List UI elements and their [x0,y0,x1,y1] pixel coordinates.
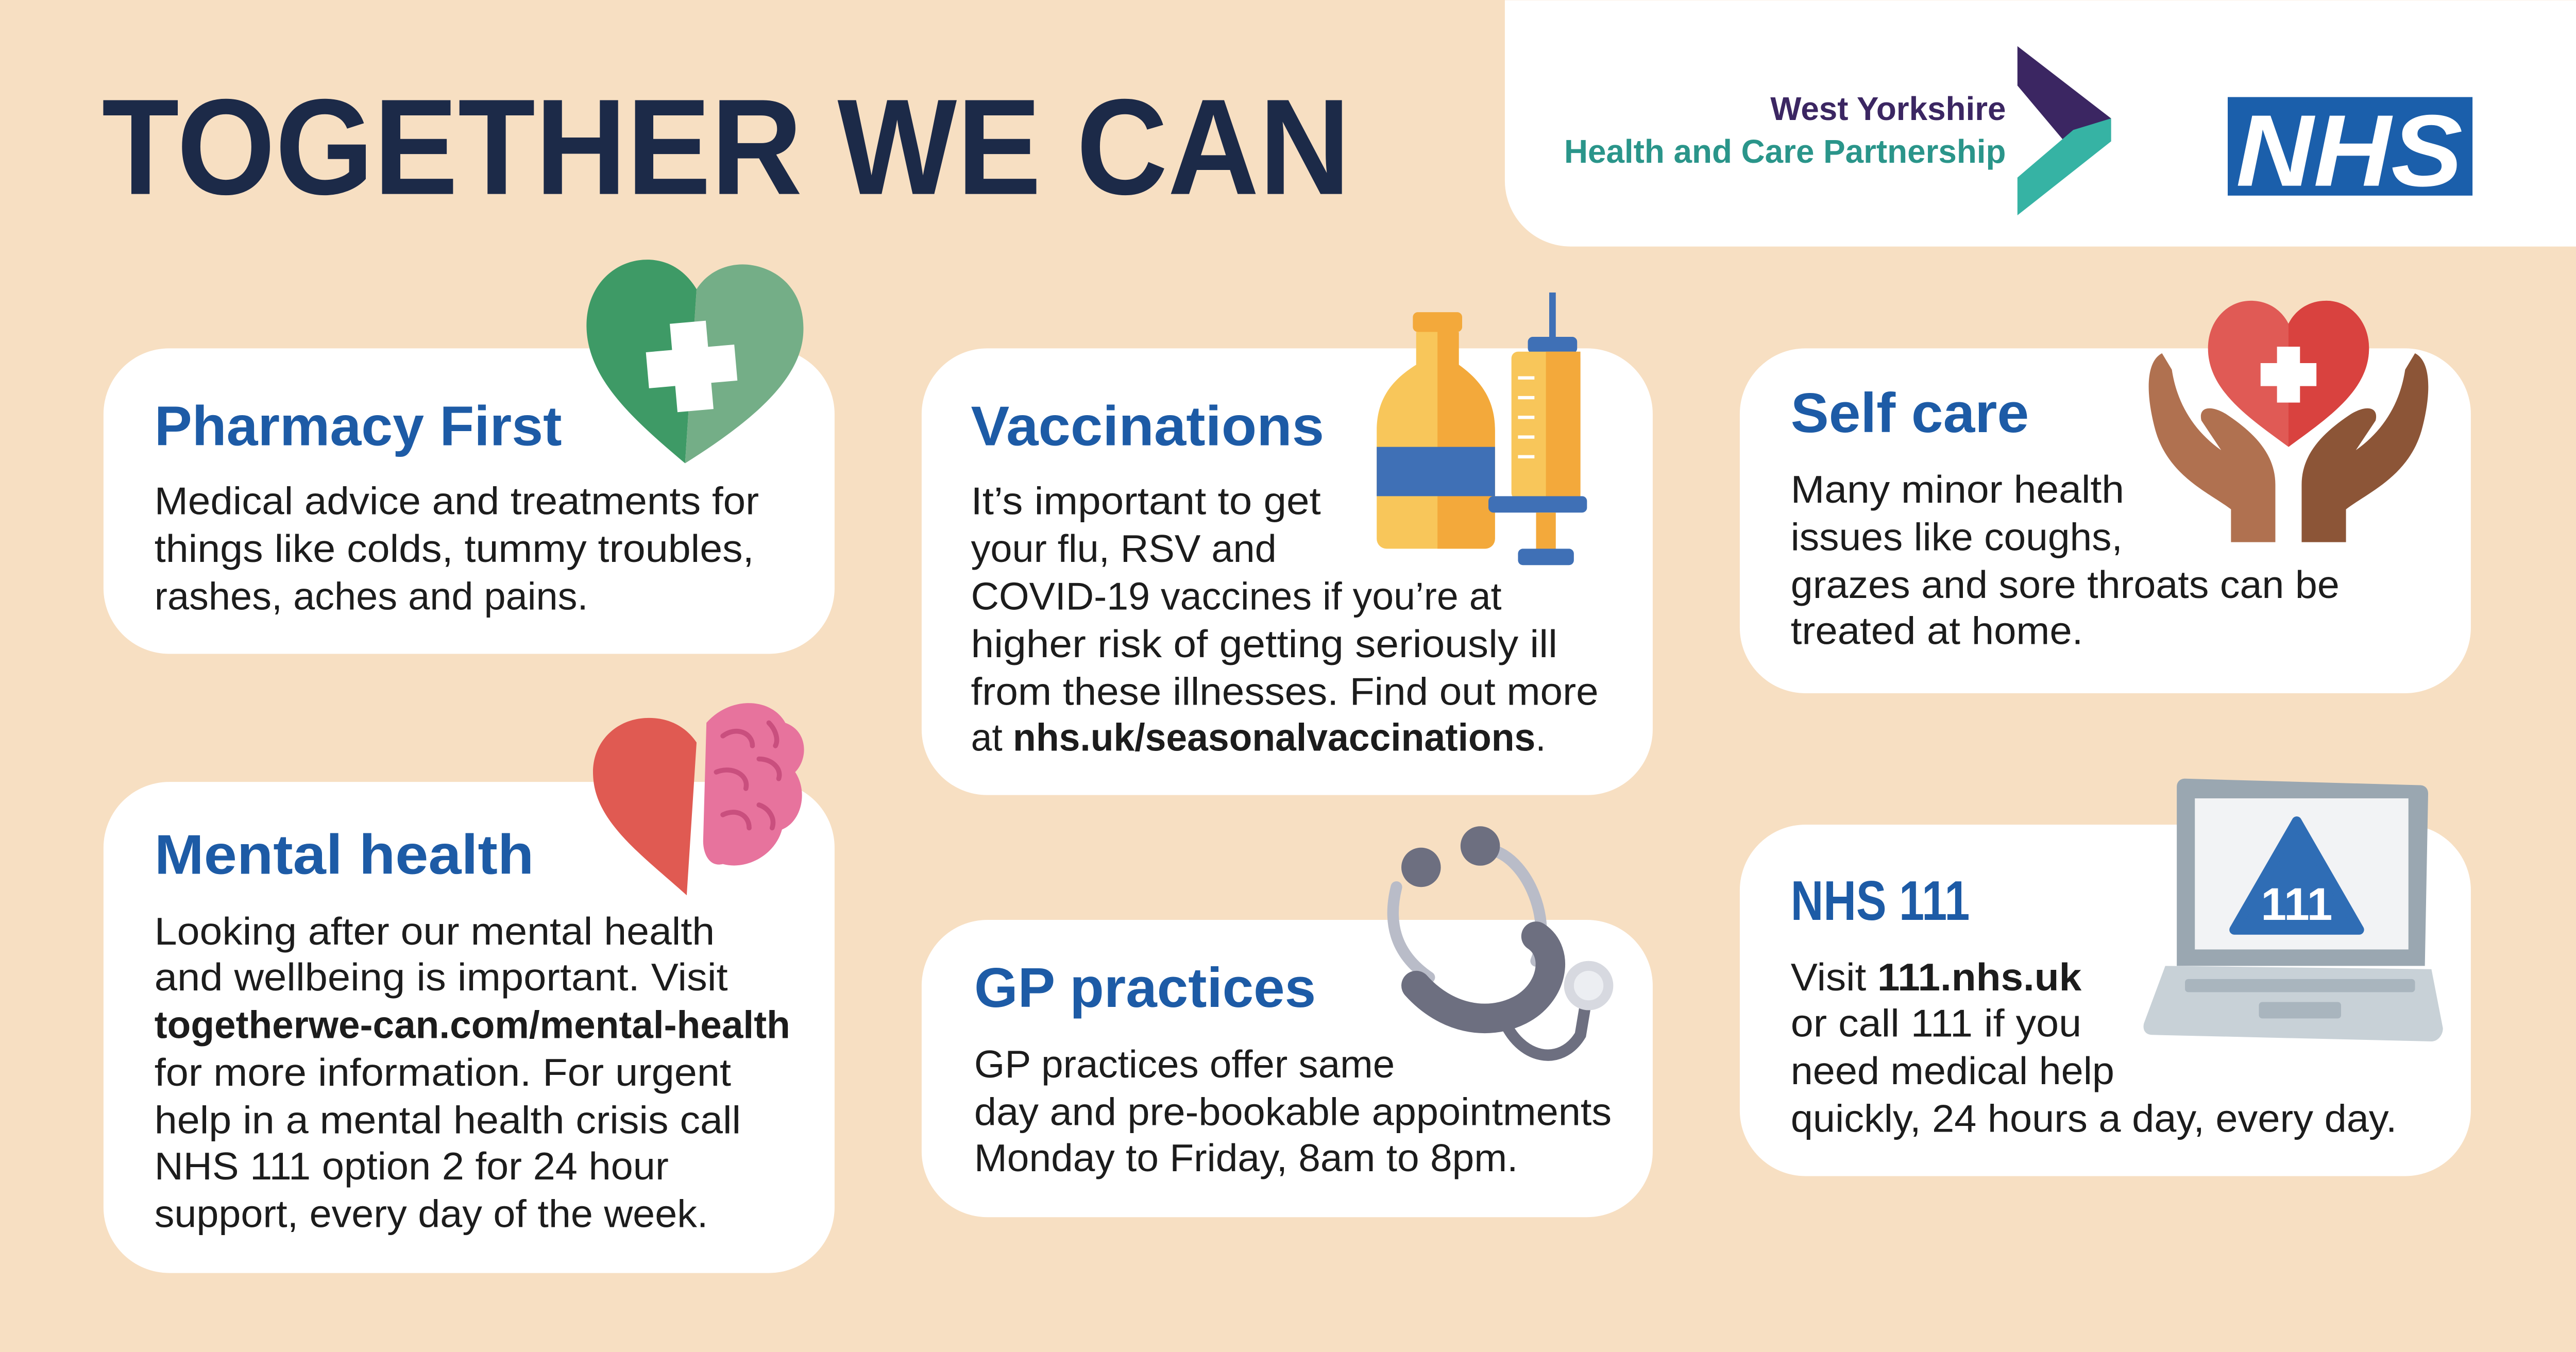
text: vaccinations body: higher risk of getting seriously ill [971,622,1557,665]
title: TOGETHER WE CAN [102,71,1350,224]
text: mental health body: and wellbeing is important. Visit [155,955,728,999]
text: nhs 111 body: need medical help [1791,1049,2114,1092]
text: mental health body: Looking after our mental health [155,910,715,953]
text: vaccinations body: COVID-19 vaccines if you’re at [971,574,1502,618]
text: vaccinations body: at nhs.uk/seasonalvaccinations. [971,716,1546,759]
text: self care body: Many minor health [1791,468,2124,511]
heading: gp practices: GP practices [974,956,1316,1019]
text: gp body: day and pre-bookable appointments [974,1090,1612,1134]
text: pharmacy body: Medical advice and treatments for [155,479,759,522]
text: mental health body [155,910,790,1235]
text: nhs 111 body: quickly, 24 hours a day, every day. [1791,1097,2397,1140]
text: mental health body: support, every day of the week. [155,1192,708,1235]
icon: green heart with cross [586,260,803,464]
icon: laptop with 111: 111 [2261,878,2332,930]
text: vaccinations body: your flu, RSV and [971,527,1277,570]
heading: nhs 111: NHS 111 [1791,869,1970,932]
text: mental health body: togetherwe-can.com/mental-health [155,1003,790,1047]
icon: hands holding heart [2149,301,2428,542]
heading: self care: Self care [1791,382,2029,444]
text: vaccinations body: from these illnesses. Find out more [971,670,1599,713]
text: vaccinations body [971,479,1599,759]
text: nhs 111 body: or call 111 if you [1791,1001,2081,1045]
panel: pharmacy first [104,348,835,654]
panel: self care [1740,348,2471,693]
text: mental health body: NHS 111 option 2 for 24 hour [155,1144,669,1188]
text: gp body: Monday to Friday, 8am to 8pm. [974,1136,1518,1179]
text: vaccinations body: It’s important to get [971,479,1321,522]
text: nhs 111 body: Visit 111.nhs.uk [1791,955,2082,999]
text: mental health body: for more information. For urgent [155,1051,731,1094]
text: self care body: grazes and sore throats can be [1791,563,2340,606]
heading: mental health: Mental health [155,824,534,886]
icon: heart and brain [593,703,804,895]
panel: mental health [104,782,835,1273]
panel: nhs 111 [1740,825,2471,1176]
heading: pharmacy first: Pharmacy First [155,395,562,457]
panel: vaccinations [922,348,1653,795]
text: mental health body: help in a mental health crisis call [155,1099,741,1142]
text: self care body [1791,468,2340,652]
icon: vaccine bottle and syringe [1377,293,1587,565]
text: gp body [974,1042,1612,1179]
panel: gp practices [922,920,1653,1217]
icon: stethoscope [1393,826,1613,1055]
text: self care body: treated at home. [1791,609,2083,652]
text: self care body: issues like coughs, [1791,516,2123,559]
text: nhs 111 body [1791,955,2397,1140]
text: pharmacy body: things like colds, tummy troubles, [155,527,754,570]
icon: laptop with 111 [2144,779,2443,1041]
logo: West Yorkshire Health and Care Partnership [1564,46,2111,215]
text: pharmacy body [155,479,759,618]
logo: NHS: NHS [2236,94,2463,208]
logo: West Yorkshire Health and Care Partnership: Health and Care Partnership [1564,133,2006,170]
text: gp body: GP practices offer same [974,1042,1395,1086]
logo: West Yorkshire Health and Care Partnership: West Yorkshire [1770,90,2006,127]
text: pharmacy body: rashes, aches and pains. [155,574,588,618]
header white panel [1505,0,2576,247]
heading: vaccinations: Vaccinations [971,395,1324,457]
